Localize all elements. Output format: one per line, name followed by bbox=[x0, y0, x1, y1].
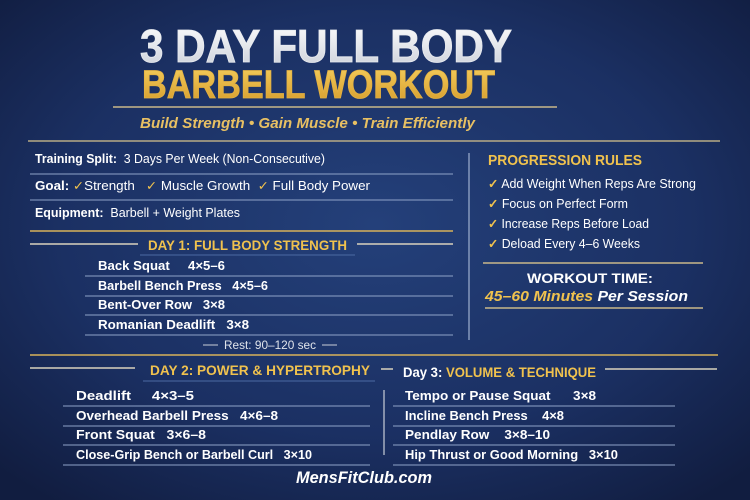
callout: workout time: WORKOUT TIME: bbox=[527, 270, 653, 286]
heading: day 2 and day 3: DAY 2: POWER & HYPERTROPHY bbox=[150, 362, 371, 378]
panel: progression rules: PROGRESSION RULES bbox=[488, 152, 642, 169]
subtitle: Build Strength • Gain Muscle • Train Efficiently bbox=[140, 115, 476, 132]
list: day 3 exercises: Tempo or Pause Squat 3×8 bbox=[405, 389, 596, 403]
panel: progression rules bbox=[488, 152, 696, 251]
title bbox=[140, 20, 512, 107]
list: day 1 exercises bbox=[85, 259, 453, 335]
text: rest bbox=[203, 340, 337, 352]
list: day 1 exercises: Romanian Deadlift 3×8 bbox=[98, 318, 249, 332]
footer: website: MensFitClub.com bbox=[296, 468, 432, 487]
panel: overview bbox=[30, 152, 453, 220]
panel: overview: Goal: ✓Strength ✓ Muscle Growth ✓ Full Body Power bbox=[35, 179, 370, 193]
list: day 3 exercises: Incline Bench Press 4×8 bbox=[405, 409, 564, 423]
list: day 1 exercises: Back Squat 4×5–6 bbox=[98, 259, 225, 273]
list: day 3 exercises: Pendlay Row 3×8–10 bbox=[405, 428, 550, 442]
heading: day 2 and day 3: Day 3: VOLUME & TECHNIQUE bbox=[403, 364, 596, 380]
heading: day 2 and day 3 bbox=[30, 362, 717, 381]
list: day 2 exercises: Overhead Barbell Press 4×6–8 bbox=[76, 409, 278, 423]
list: day 3 exercises bbox=[393, 389, 675, 465]
callout: workout time bbox=[484, 270, 688, 305]
panel: progression rules: ✓ Add Weight When Reps Are Strong bbox=[488, 177, 696, 191]
list: day 2 exercises bbox=[63, 389, 370, 465]
heading: day 1: DAY 1: FULL BODY STRENGTH bbox=[148, 237, 347, 253]
list: day 1 exercises: Bent-Over Row 3×8 bbox=[98, 298, 225, 312]
list: day 2 exercises: Front Squat 3×6–8 bbox=[76, 428, 206, 442]
title: 3 DAY FULL BODY bbox=[140, 20, 512, 72]
text: rest: Rest: 90–120 sec bbox=[224, 340, 316, 352]
panel: progression rules: ✓ Increase Reps Before Load bbox=[488, 217, 649, 231]
list: day 3 exercises: Hip Thrust or Good Morning 3×10 bbox=[405, 448, 618, 462]
list: day 2 exercises: Close-Grip Bench or Barbell Curl 3×10 bbox=[76, 448, 312, 462]
panel: progression rules: ✓ Deload Every 4–6 Weeks bbox=[488, 237, 640, 251]
panel: overview: Training Split: 3 Days Per Week (Non-Consecutive) bbox=[35, 152, 325, 166]
title: BARBELL WORKOUT bbox=[142, 63, 495, 107]
list: day 2 exercises: Deadlift 4×3–5 bbox=[76, 389, 194, 403]
callout: workout time: 45–60 Minutes Per Session bbox=[484, 288, 688, 305]
panel: overview: Equipment: Barbell + Weight Plates bbox=[35, 206, 240, 220]
list: day 1 exercises: Barbell Bench Press 4×5–6 bbox=[98, 279, 268, 293]
panel: progression rules: ✓ Focus on Perfect Form bbox=[488, 197, 628, 211]
